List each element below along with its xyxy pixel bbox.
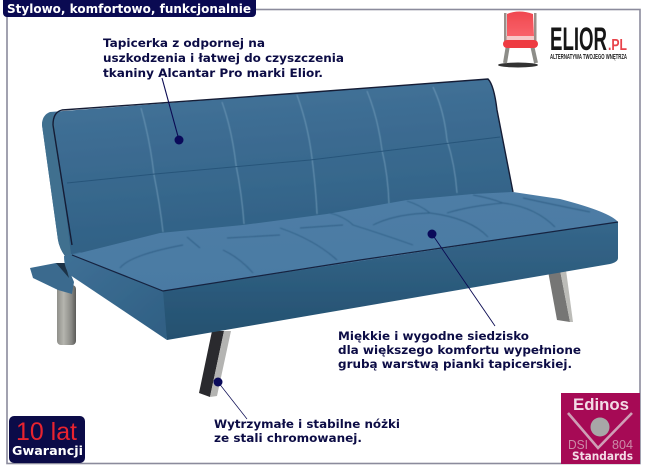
badge: Edinos DSI 804 standards: DSI: [568, 437, 588, 452]
backrest: [42, 79, 515, 262]
callout: upholstery: uszkodzenia i łatwej do czyszczenia: [103, 51, 344, 65]
badge: 10 years warranty: Gwarancji: [12, 443, 83, 458]
callout: seat: dla większego komfortu wypełnione: [338, 343, 581, 357]
badge: 10 years warranty: 10 lat: [16, 418, 77, 446]
front chrome leg: [199, 331, 231, 397]
callout: seat: grubą warstwą pianki tapicerskiej.: [338, 357, 572, 371]
left side arm panel: [30, 263, 74, 294]
callout: upholstery: Tapicerka z odpornej na: [103, 36, 265, 50]
logo: Elior: .PL: [608, 37, 627, 54]
left cylinder leg: [57, 285, 76, 345]
callout: legs: [214, 378, 400, 445]
seat cushion top: [72, 192, 618, 291]
badge: Edinos DSI 804 standards: 804: [612, 437, 633, 452]
badge: Edinos DSI 804 standards: Standards: [572, 449, 633, 463]
logo: Elior: [498, 12, 627, 68]
seat piping: [72, 222, 618, 291]
seat cushion front and side: [64, 222, 618, 340]
badge: Edinos DSI 804 standards: [561, 393, 640, 464]
callout: legs: ze stali chromowanej.: [214, 431, 362, 445]
callout: upholstery: [103, 36, 344, 144]
badge: 10 years warranty: [9, 416, 85, 463]
title banner: Stylowo, komfortowo, funkcjonalnie: [7, 2, 251, 16]
callout: upholstery: tkaniny Alcantar Pro marki Elior.: [103, 66, 323, 80]
logo: Elior: ELIOR: [550, 21, 607, 57]
callout: legs: Wytrzymałe i stabilne nóżki: [214, 417, 400, 431]
right chrome leg: [548, 270, 573, 322]
backrest tuft seams: [141, 87, 457, 232]
sofa illustration: [30, 79, 618, 397]
badge: Edinos DSI 804 standards: Edinos: [573, 395, 629, 414]
seat tuft seams: [120, 195, 590, 273]
callout: seat: [338, 230, 581, 371]
icon: red chair: [498, 12, 538, 68]
callout: seat: Miękkie i wygodne siedzisko: [338, 329, 529, 343]
backrest piping: [53, 79, 513, 245]
